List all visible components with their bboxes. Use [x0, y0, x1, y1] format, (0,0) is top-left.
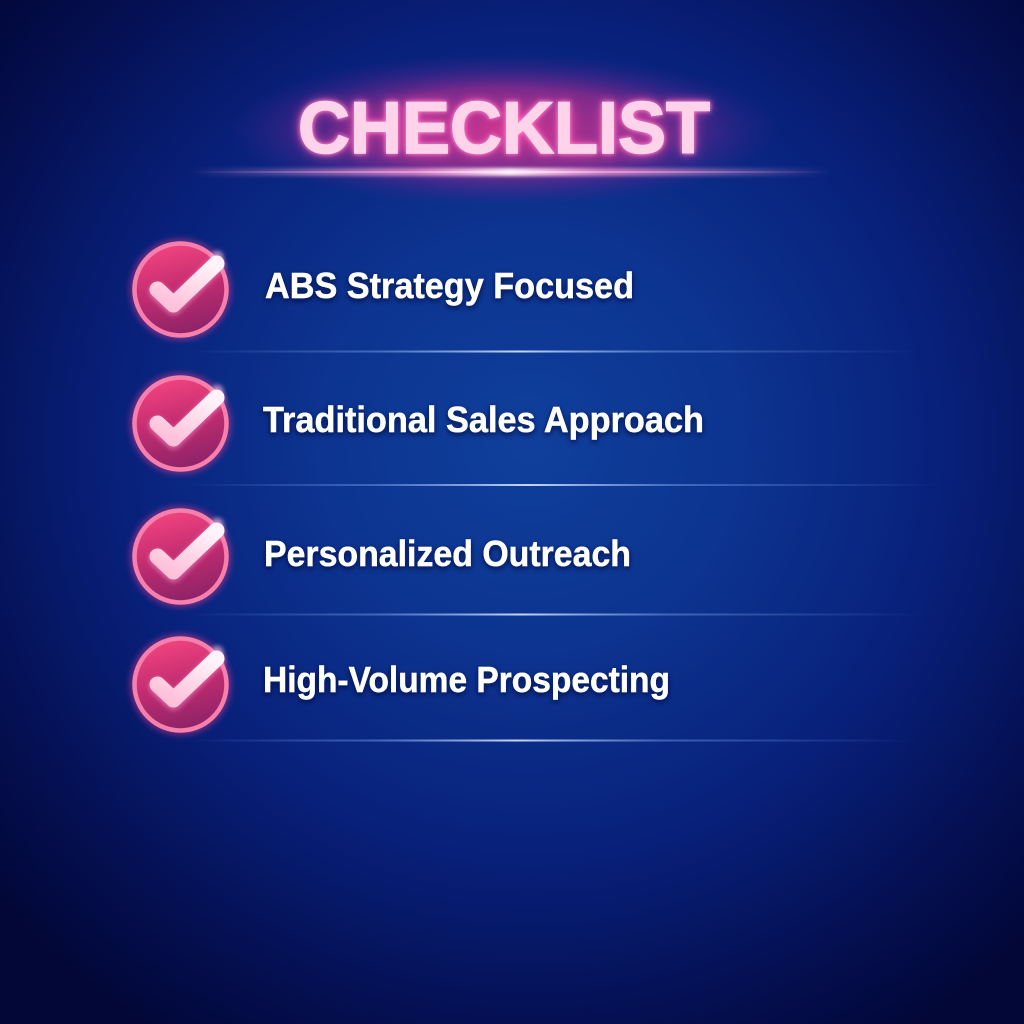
title: CHECKLIST	[298, 88, 710, 169]
icon: check badge	[130, 372, 232, 474]
icon: check badge	[130, 238, 232, 340]
divider	[190, 740, 915, 742]
title	[229, 54, 779, 206]
label: ABS Strategy Focused	[265, 265, 634, 306]
label: Traditional Sales Approach	[263, 399, 704, 440]
divider	[190, 484, 940, 486]
label: Personalized Outreach	[264, 533, 631, 574]
title: CHECKLIST	[298, 88, 710, 169]
icon: check badge	[130, 634, 232, 736]
divider	[190, 350, 920, 352]
label: High-Volume Prospecting	[263, 659, 670, 700]
icon: check badge	[130, 506, 232, 608]
checklist item: High-Volume Prospecting	[130, 634, 670, 736]
checklist item: Traditional Sales Approach	[130, 372, 704, 474]
title: CHECKLIST	[298, 88, 710, 169]
checklist item: ABS Strategy Focused	[130, 238, 634, 340]
title underline	[190, 168, 830, 176]
checklist item: Personalized Outreach	[130, 506, 631, 608]
divider	[190, 614, 925, 616]
